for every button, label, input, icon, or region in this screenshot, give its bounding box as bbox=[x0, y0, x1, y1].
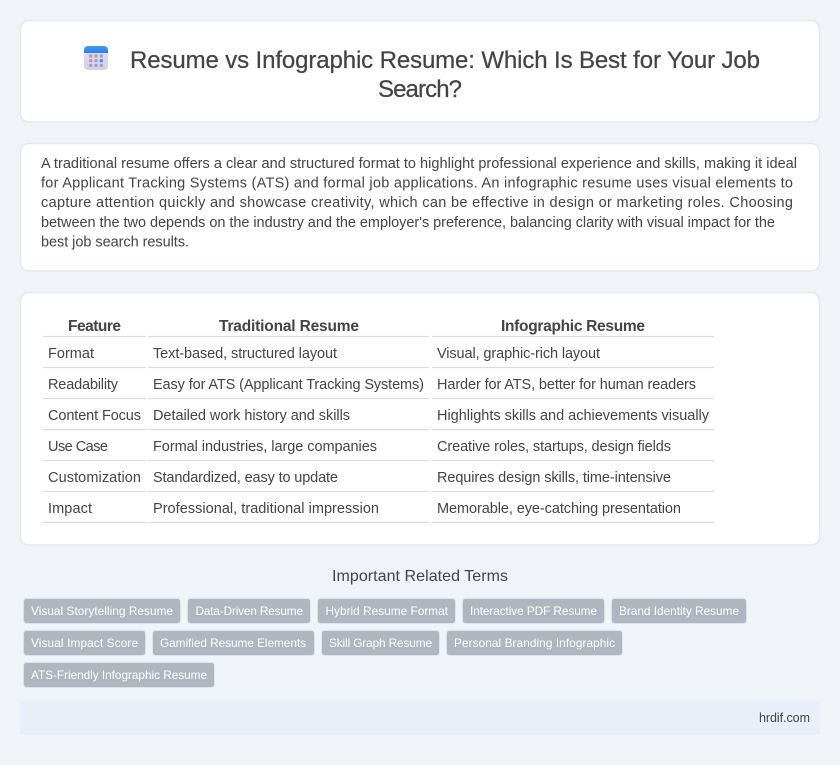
row: format bbox=[48, 346, 600, 362]
tag bbox=[24, 630, 146, 656]
row: content focus: Content Focus bbox=[48, 408, 141, 424]
row: customization: Standardized, easy to update bbox=[153, 470, 338, 486]
tag bbox=[318, 598, 456, 624]
intro paragraph: A traditional resume offers a clear and structured format to highlight professional experience and skills, making it ideal bbox=[41, 156, 797, 172]
row: impact: Professional, traditional impression bbox=[153, 501, 379, 517]
tag bbox=[152, 630, 314, 656]
tag: Gamified Resume Elements bbox=[160, 636, 306, 650]
tag: Hybrid Resume Format bbox=[326, 604, 449, 618]
tag bbox=[322, 630, 440, 656]
icon: calendar bbox=[84, 46, 108, 70]
row: customization: Customization bbox=[48, 470, 141, 486]
tag: Visual Impact Score bbox=[31, 636, 138, 650]
title bbox=[130, 47, 760, 103]
row: use case: Creative roles, startups, design fields bbox=[437, 439, 671, 455]
intro paragraph: capture attention quickly and showcase creativity, which can be effective in design or marketing roles. Choosing bbox=[41, 195, 793, 211]
tag bbox=[188, 598, 310, 624]
row: format: Text-based, structured layout bbox=[153, 346, 337, 362]
header panel bbox=[20, 20, 820, 122]
tag: Interactive PDF Resume bbox=[470, 604, 597, 618]
row: readability: Readability bbox=[48, 377, 119, 393]
row: readability bbox=[48, 377, 696, 393]
tag bbox=[462, 598, 604, 624]
tag bbox=[24, 662, 214, 688]
tag: Data-Driven Resume bbox=[196, 604, 303, 618]
heading: related terms: Important Related Terms bbox=[332, 568, 508, 585]
tag bbox=[446, 630, 622, 656]
row: impact: Memorable, eye-catching presentation bbox=[437, 501, 681, 517]
title: Search? bbox=[378, 76, 462, 103]
row: impact: Impact bbox=[48, 501, 92, 517]
row: use case: Use Case bbox=[48, 439, 108, 455]
tag bbox=[612, 598, 746, 624]
footer bbox=[20, 701, 820, 735]
row: readability: Harder for ATS, better for human readers bbox=[437, 377, 696, 393]
tag: Visual Storytelling Resume bbox=[31, 604, 173, 618]
row: impact bbox=[48, 501, 681, 517]
tag bbox=[24, 598, 180, 624]
tag: Skill Graph Resume bbox=[329, 636, 432, 650]
row: readability: Easy for ATS (Applicant Tracking Systems) bbox=[153, 377, 424, 393]
tag: Personal Branding Infographic bbox=[454, 636, 615, 650]
row: format: Format bbox=[48, 346, 94, 362]
row: customization: Requires design skills, time-intensive bbox=[437, 470, 671, 486]
table header: Traditional Resume bbox=[219, 318, 359, 335]
row: content focus: Detailed work history and skills bbox=[153, 408, 350, 424]
table header: Feature bbox=[68, 318, 121, 335]
panel: intro text bbox=[20, 144, 820, 271]
row: content focus bbox=[48, 408, 710, 424]
row: use case: Formal industries, large companies bbox=[153, 439, 377, 455]
tag: Brand Identity Resume bbox=[619, 604, 739, 618]
row: content focus: Highlights skills and achievements visually bbox=[437, 408, 710, 424]
intro paragraph: best job search results. bbox=[41, 234, 189, 250]
intro paragraph bbox=[41, 156, 797, 250]
row: format: Visual, graphic-rich layout bbox=[437, 346, 600, 362]
table header: Infographic Resume bbox=[501, 318, 645, 335]
row: customization bbox=[48, 470, 671, 486]
related terms tags bbox=[24, 598, 746, 688]
row: use case bbox=[48, 439, 671, 455]
tag: ATS-Friendly Infographic Resume bbox=[31, 668, 207, 682]
footer: hrdif.com bbox=[759, 711, 810, 725]
intro paragraph: for Applicant Tracking Systems (ATS) and formal job applications. An infographic resume uses visual elements to bbox=[41, 176, 793, 192]
table header bbox=[68, 318, 645, 335]
panel: comparison table bbox=[20, 292, 820, 545]
intro paragraph: between the two depends on the industry and the employer's preference, balancing clarity with visual impact for the bbox=[41, 215, 775, 231]
title: Resume vs Infographic Resume: Which Is Best for Your Job bbox=[130, 47, 760, 74]
